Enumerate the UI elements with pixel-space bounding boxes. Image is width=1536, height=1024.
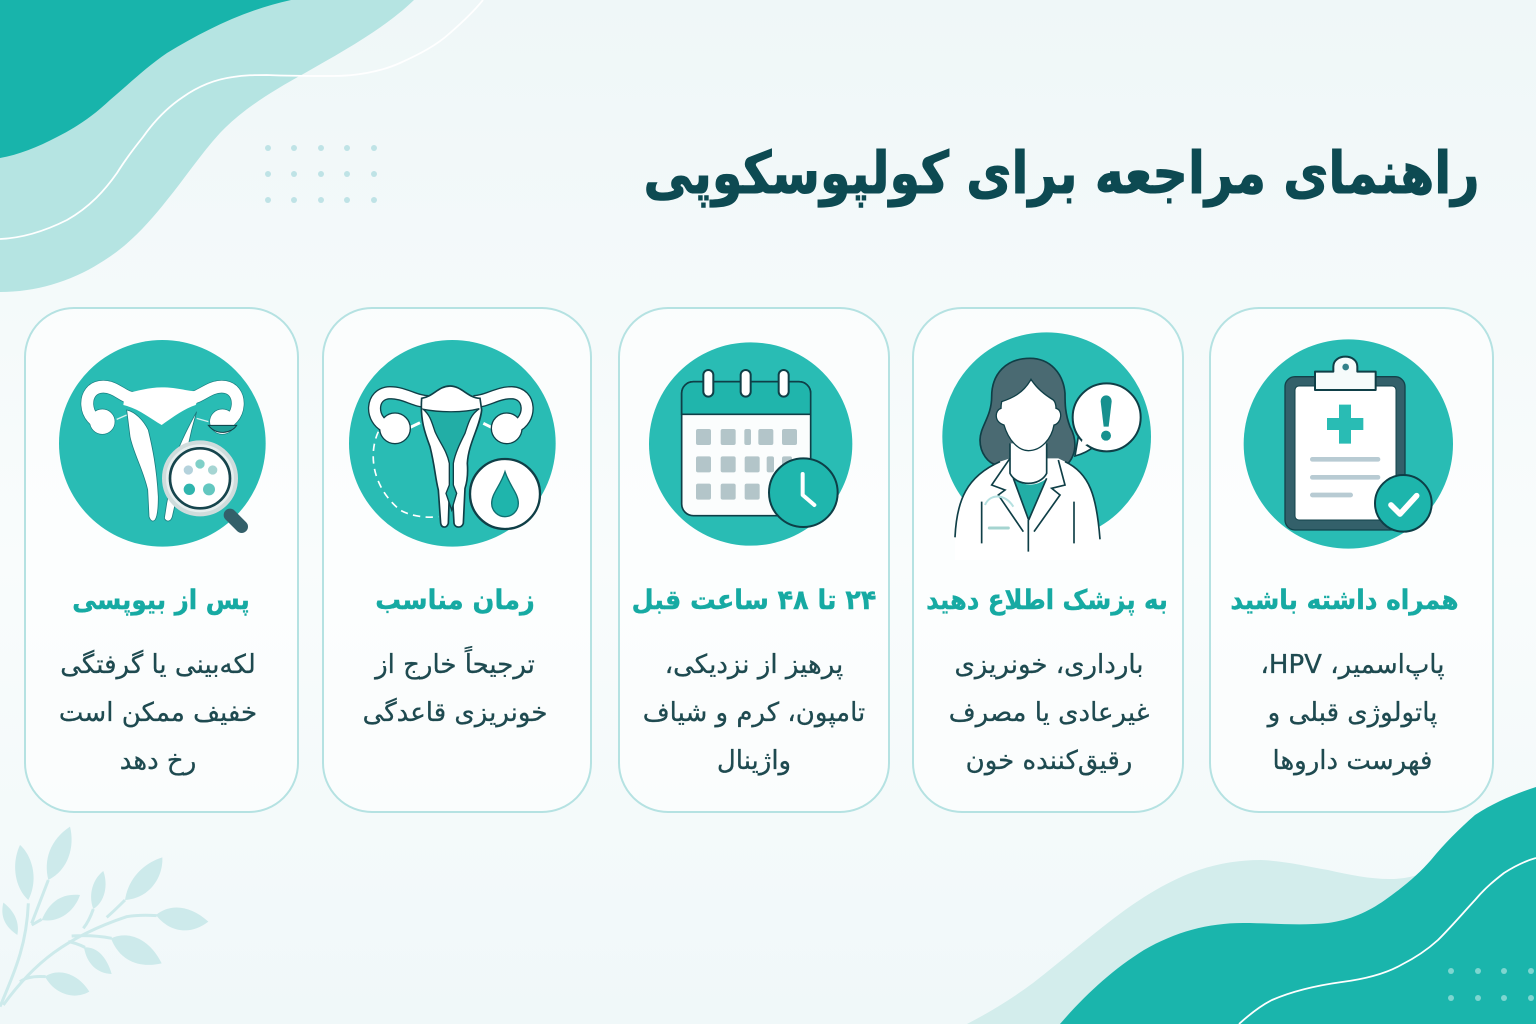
body text: لکه‌بینی یا گرفتگی xyxy=(60,650,256,680)
body text: غیرعادی یا مصرف xyxy=(949,698,1149,728)
icon: uterus with drop xyxy=(349,340,556,547)
icon: clipboard xyxy=(1244,339,1453,549)
body text: تامپون، کرم و شیاف xyxy=(643,698,865,728)
body text: رخ دهد xyxy=(120,746,196,776)
body text xyxy=(949,650,1149,776)
body text xyxy=(59,650,257,776)
heading: به پزشک اطلاع دهید xyxy=(926,585,1168,616)
decorative leaves xyxy=(0,826,208,1008)
body text: رقیق‌کننده خون xyxy=(966,746,1132,776)
icon: uterus with magnifier xyxy=(59,340,266,547)
dot grid: bottom right xyxy=(1448,968,1534,1001)
body text: فهرست داروها xyxy=(1273,746,1432,776)
icon: calendar xyxy=(649,342,852,546)
dot grid: top left xyxy=(265,145,377,203)
body text: ترجیحاً خارج از xyxy=(375,650,535,680)
heading: زمان مناسب xyxy=(375,585,535,616)
heading: ۲۴ تا ۴۸ ساعت قبل xyxy=(632,585,876,616)
body text: خفیف ممکن است xyxy=(59,698,257,728)
panel: 24 to 48 hours before xyxy=(618,307,890,813)
title: راهنمای مراجعه برای کولپوسکوپی xyxy=(644,139,1480,207)
body text xyxy=(363,646,547,728)
body text: بارداری، خونریزی xyxy=(954,650,1144,680)
panel: bring with you xyxy=(1209,307,1494,813)
panel: after biopsy xyxy=(24,307,299,813)
body text: پاتولوژی قبلی و xyxy=(1268,698,1437,728)
icon: doctor xyxy=(942,332,1151,552)
heading: پس از بیوپسی xyxy=(72,585,250,616)
body text xyxy=(1261,650,1444,776)
body text: خونریزی قاعدگی xyxy=(363,698,547,728)
body text: پرهیز از نزدیکی، xyxy=(665,650,843,680)
body text xyxy=(643,650,865,776)
heading: همراه داشته باشید xyxy=(1230,585,1459,616)
panel: tell your doctor xyxy=(912,307,1184,813)
body text: واژینال xyxy=(717,746,791,776)
panel: right time xyxy=(322,307,592,813)
body text: پاپ‌اسمیر، HPV، xyxy=(1261,650,1444,680)
